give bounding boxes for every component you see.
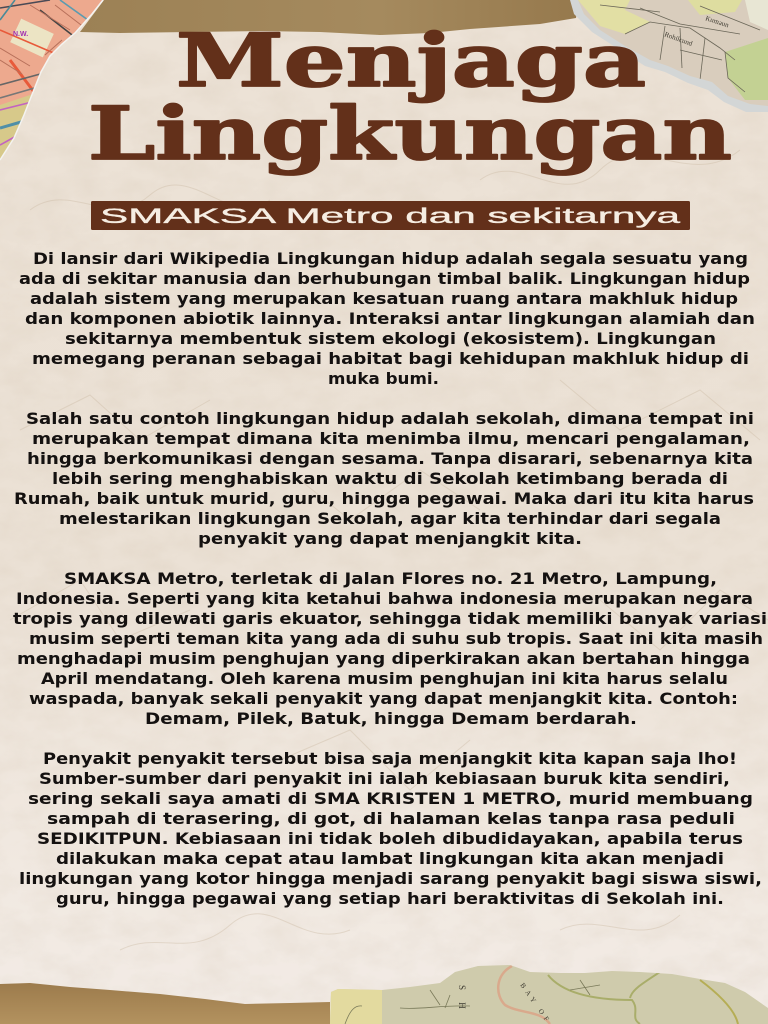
title: Menjaga (176, 18, 646, 104)
paragraph 2: hingga berkomunikasi dengan sesama. Tanpa disarari, sebenarnya kita (27, 449, 753, 468)
paragraph 3: Demam, Pilek, Batuk, hingga Demam berdarah. (145, 709, 637, 728)
paragraph 1: Di lansir dari Wikipedia Lingkungan hidup adalah segala sesuatu yang (33, 249, 748, 268)
torn map: top right (570, 0, 768, 112)
paragraph 2: Salah satu contoh lingkungan hidup adalah sekolah, dimana tempat ini (26, 409, 754, 428)
paragraph 1 (19, 249, 755, 388)
title: Lingkungan (88, 91, 732, 177)
torn map: top left (0, 0, 102, 158)
paragraph 2: lebih sering menghabiskan waktu di Sekolah ketimbang berada di (52, 469, 728, 488)
title (88, 18, 732, 177)
torn map: top right: Kumaun (704, 14, 730, 30)
paragraph 2: Rumah, baik untuk murid, guru, hingga pegawai. Maka dari itu kita harus (14, 489, 754, 508)
paragraph 3: Indonesia. Seperti yang kita ketahui bahwa indonesia merupakan negara (16, 589, 753, 608)
paragraph 2: penyakit yang dapat menjangkit kita. (198, 529, 582, 548)
torn map: bottom (328, 960, 768, 1024)
paragraph 4: sampah di terasering, di got, di halaman kelas tanpa rasa peduli (47, 809, 735, 828)
paragraph 4: guru, hingga pegawai yang setiap hari beraktivitas di Sekolah ini. (56, 889, 724, 908)
paragraph 2 (14, 409, 754, 548)
paragraph 1: memegang peranan sebagai habitat bagi kehidupan makhluk hidup di (32, 349, 749, 368)
subtitle banner (91, 201, 690, 230)
paragraph 4: Sumber-sumber dari penyakit ini ialah kebiasaan buruk kita sendiri, (39, 769, 730, 788)
torn map: top right: Rohilcund (663, 30, 694, 48)
paragraph 4: SEDIKITPUN. Kebiasaan ini tidak boleh dibudidayakan, apabila terus (37, 829, 743, 848)
paragraph 3: menghadapi musim penghujan yang diperkirakan akan bertahan hingga (17, 649, 750, 668)
subtitle banner: SMAKSA Metro dan sekitarnya (100, 205, 681, 228)
paragraph 3: tropis yang dilewati garis ekuator, sehingga tidak memiliki banyak variasi (13, 609, 767, 628)
paragraph 1: adalah sistem yang merupakan kesatuan ruang antara makhluk hidup (30, 289, 738, 308)
paragraph 3: SMAKSA Metro, terletak di Jalan Flores no. 21 Metro, Lampung, (64, 569, 717, 588)
torn map: bottom: S H (457, 985, 467, 1014)
paragraph 4: Penyakit penyakit tersebut bisa saja menjangkit kita kapan saja lho! (43, 749, 737, 768)
paragraph 2: melestarikan lingkungan Sekolah, agar kita terhindar dari segala (59, 509, 721, 528)
paragraph 1: muka bumi. (328, 369, 439, 388)
paragraph 4: lingkungan yang kotor hingga menjadi sarang penyakit bagi siswa siswi, (19, 869, 762, 888)
paragraph 4: dilakukan maka cepat atau lambat lingkungan kita akan menjadi (56, 849, 724, 868)
paragraph 2: merupakan tempat dimana kita menimba ilmu, mencari pengalaman, (32, 429, 750, 448)
paragraph 4 (19, 749, 762, 908)
paragraph 1: dan komponen abiotik lainnya. Interaksi antar lingkungan alamiah dan (25, 309, 755, 328)
paragraph 4: sering sekali saya amati di SMA KRISTEN 1 METRO, murid membuang (28, 789, 753, 808)
paragraph 3 (13, 569, 767, 728)
paragraph 3: April mendatang. Oleh karena musim penghujan ini kita harus selalu (41, 669, 728, 688)
torn map: top left: N.W. (13, 31, 28, 38)
paragraph 1: ada di sekitar manusia dan berhubungan timbal balik. Lingkungan hidup (19, 269, 750, 288)
paragraph 3: musim seperti teman kita yang ada di suhu sub tropis. Saat ini kita masih (29, 629, 763, 648)
torn brown paper: bottom (0, 983, 330, 1024)
paragraph 1: sekitarnya membentuk sistem ekologi (ekosistem). Lingkungan (65, 329, 716, 348)
torn brown paper: top (80, 0, 578, 35)
paragraph 3: waspada, banyak sekali penyakit yang dapat menjangkit kita. Contoh: (29, 689, 738, 708)
